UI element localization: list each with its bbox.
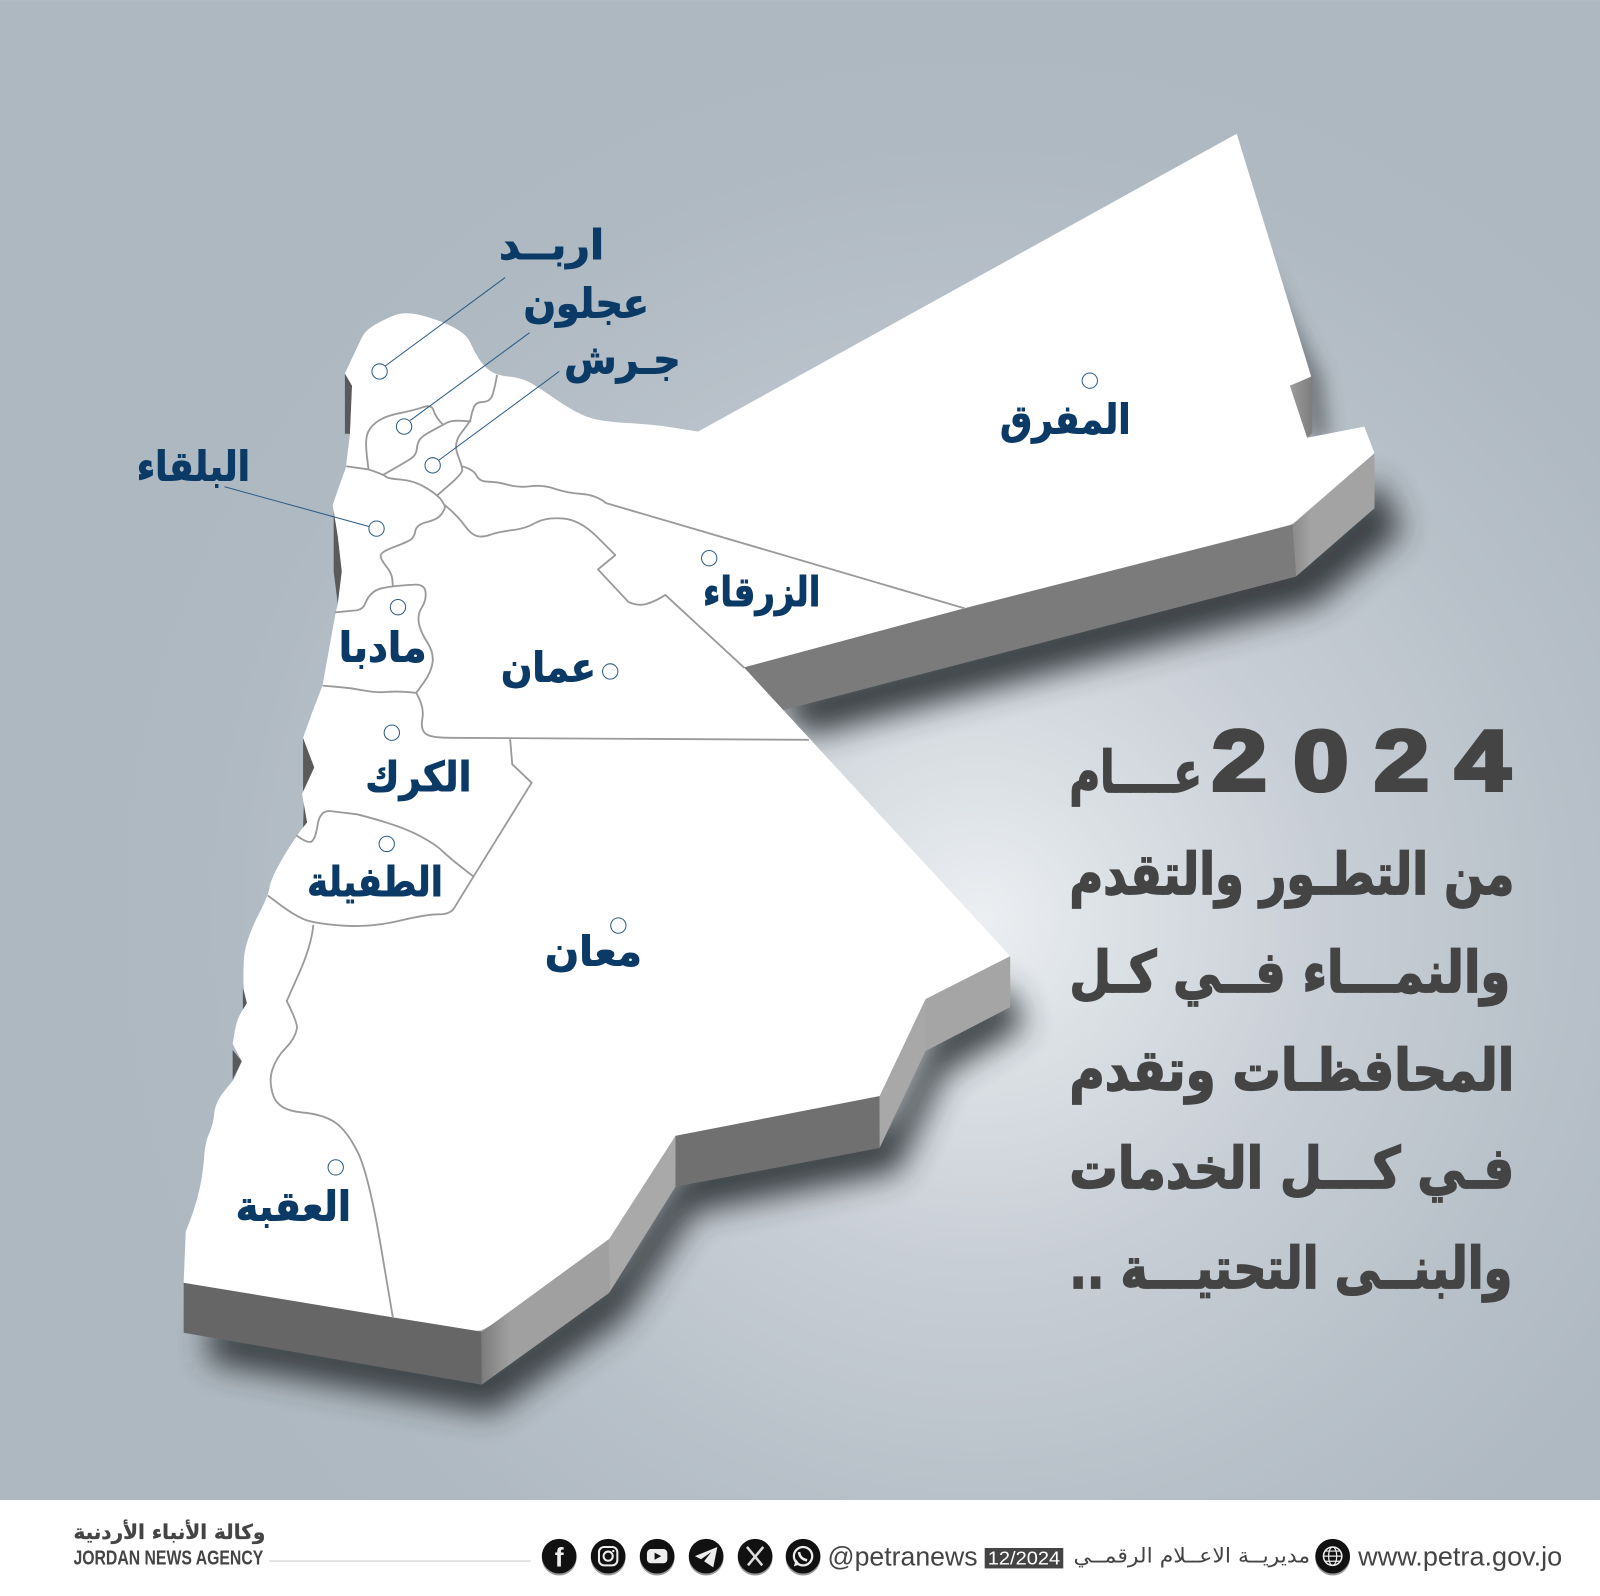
website: www.petra.gov.jo <box>1357 1541 1562 1571</box>
icon: facebook: f <box>555 1542 564 1572</box>
label: Jerash: جـرش <box>564 336 681 384</box>
side: maan step <box>880 999 926 1148</box>
footer background <box>0 1500 1600 1596</box>
label: Amman: عمان <box>501 644 596 692</box>
label: Balqa: البلقاء <box>137 443 250 491</box>
line 2: والنمـــاء فــي كـل <box>1069 940 1510 1007</box>
label: Madaba: مادبا <box>339 623 427 671</box>
icon: x <box>738 1539 772 1576</box>
side: south face <box>184 1283 482 1385</box>
icon: instagram <box>591 1539 626 1576</box>
icon: youtube <box>640 1539 674 1576</box>
label: Tafila: الطفيلة <box>307 858 443 906</box>
year 2024: 4 <box>1455 713 1511 809</box>
icon: globe <box>1315 1539 1350 1576</box>
side: west crescents <box>233 374 352 1080</box>
line 4: فـي كـــل الخدمات <box>1069 1136 1514 1202</box>
social handle: @petranews <box>828 1541 978 1571</box>
year 2024 <box>1212 713 1511 809</box>
side: aqaba east <box>609 1136 676 1293</box>
side: mafraq notch <box>1290 376 1312 439</box>
agency name english: JORDAN NEWS AGENCY <box>73 1547 263 1569</box>
side: maan east <box>926 956 1010 1051</box>
icon: whatsapp <box>786 1539 820 1576</box>
footer <box>0 1500 1600 1596</box>
side: mafraq corner <box>1293 453 1374 577</box>
agency name arabic: وكالة الأنباء الأردنية <box>73 1518 265 1544</box>
map top surface <box>184 134 1374 1331</box>
label: Karak: الكرك <box>365 753 471 801</box>
label: Aqaba: العقبة <box>236 1182 351 1230</box>
label: Zarqa: الزرقاء <box>703 568 820 616</box>
map shadow <box>209 255 1403 1413</box>
side: mafraq south <box>744 525 1296 710</box>
label: Maan: معان <box>545 927 642 975</box>
label: Ajloun: عجلون <box>523 279 649 327</box>
icon: facebook <box>542 1539 577 1576</box>
line 3: المحافظـات وتقدم <box>1069 1038 1514 1105</box>
word: year: عــــام <box>1069 740 1202 806</box>
label: Irbid: اربــد <box>499 221 604 269</box>
governorate borders <box>268 376 964 1317</box>
year 2024: 0 <box>1293 713 1348 809</box>
icon: telegram <box>689 1539 723 1576</box>
footer divider <box>269 1560 531 1562</box>
side: south-east corner <box>482 1239 609 1385</box>
label: Mafraq: المفرق <box>1000 396 1131 444</box>
governorate labels <box>137 221 1131 1230</box>
map extrusion sides <box>184 374 1374 1385</box>
year 2024: 2 <box>1212 713 1267 809</box>
year 2024: 2 <box>1374 713 1429 809</box>
location markers <box>328 364 1097 1175</box>
side: maan south <box>676 1096 880 1187</box>
department name: مديريــة الاعــلام الرقمــي <box>1073 1543 1310 1567</box>
leader lines <box>224 278 559 527</box>
headline text block <box>1069 713 1514 1303</box>
date badge: 12/2024 <box>988 1547 1060 1568</box>
